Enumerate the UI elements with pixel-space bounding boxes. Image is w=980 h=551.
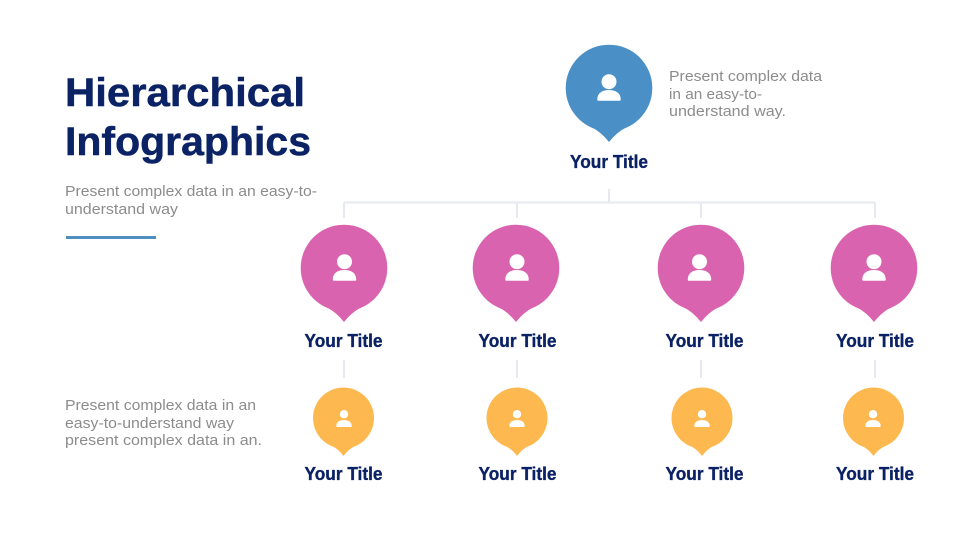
second level node 4 [831,225,917,351]
heading: Hierarchical Infographics: Infographics [65,120,311,164]
heading: Hierarchical Infographics: Hierarchical [65,71,305,115]
top description text: in an easy-to- [669,86,762,103]
accent rule [66,236,156,239]
top node: blue pin [566,45,652,172]
subtitle text: Present complex data in an easy-to- [65,183,317,200]
third level node 2: Your Title [478,464,556,484]
subtitle text [65,183,317,218]
top description text: Present complex data [669,68,823,85]
side description text: easy-to-understand way [65,415,235,432]
second level node 1: Your Title [304,331,382,351]
heading: Hierarchical Infographics [65,71,311,164]
second level node 3 [658,225,744,351]
second level node 4: Your Title [836,331,914,351]
side description text: Present complex data in an [65,397,256,414]
second level node 1 [301,225,387,351]
top node: blue pin: Your Title [570,152,648,172]
third level node 1 [304,388,382,484]
third level node 4 [836,388,914,484]
third level node 1: Your Title [304,464,382,484]
top description text [669,68,823,120]
third level node 3 [666,388,744,484]
third level node 2 [478,388,556,484]
side description text: present complex data in an. [65,432,262,449]
side description text [65,397,262,449]
top description text: understand way. [669,103,786,120]
third level node 3: Your Title [666,464,744,484]
third level node 4: Your Title [836,464,914,484]
subtitle text: understand way [65,201,179,218]
second level node 2 [473,225,559,351]
connector lines: top level to second level [344,189,875,218]
connector lines: second level to third level [344,360,875,378]
second level node 2: Your Title [478,331,556,351]
second level node 3: Your Title [666,331,744,351]
